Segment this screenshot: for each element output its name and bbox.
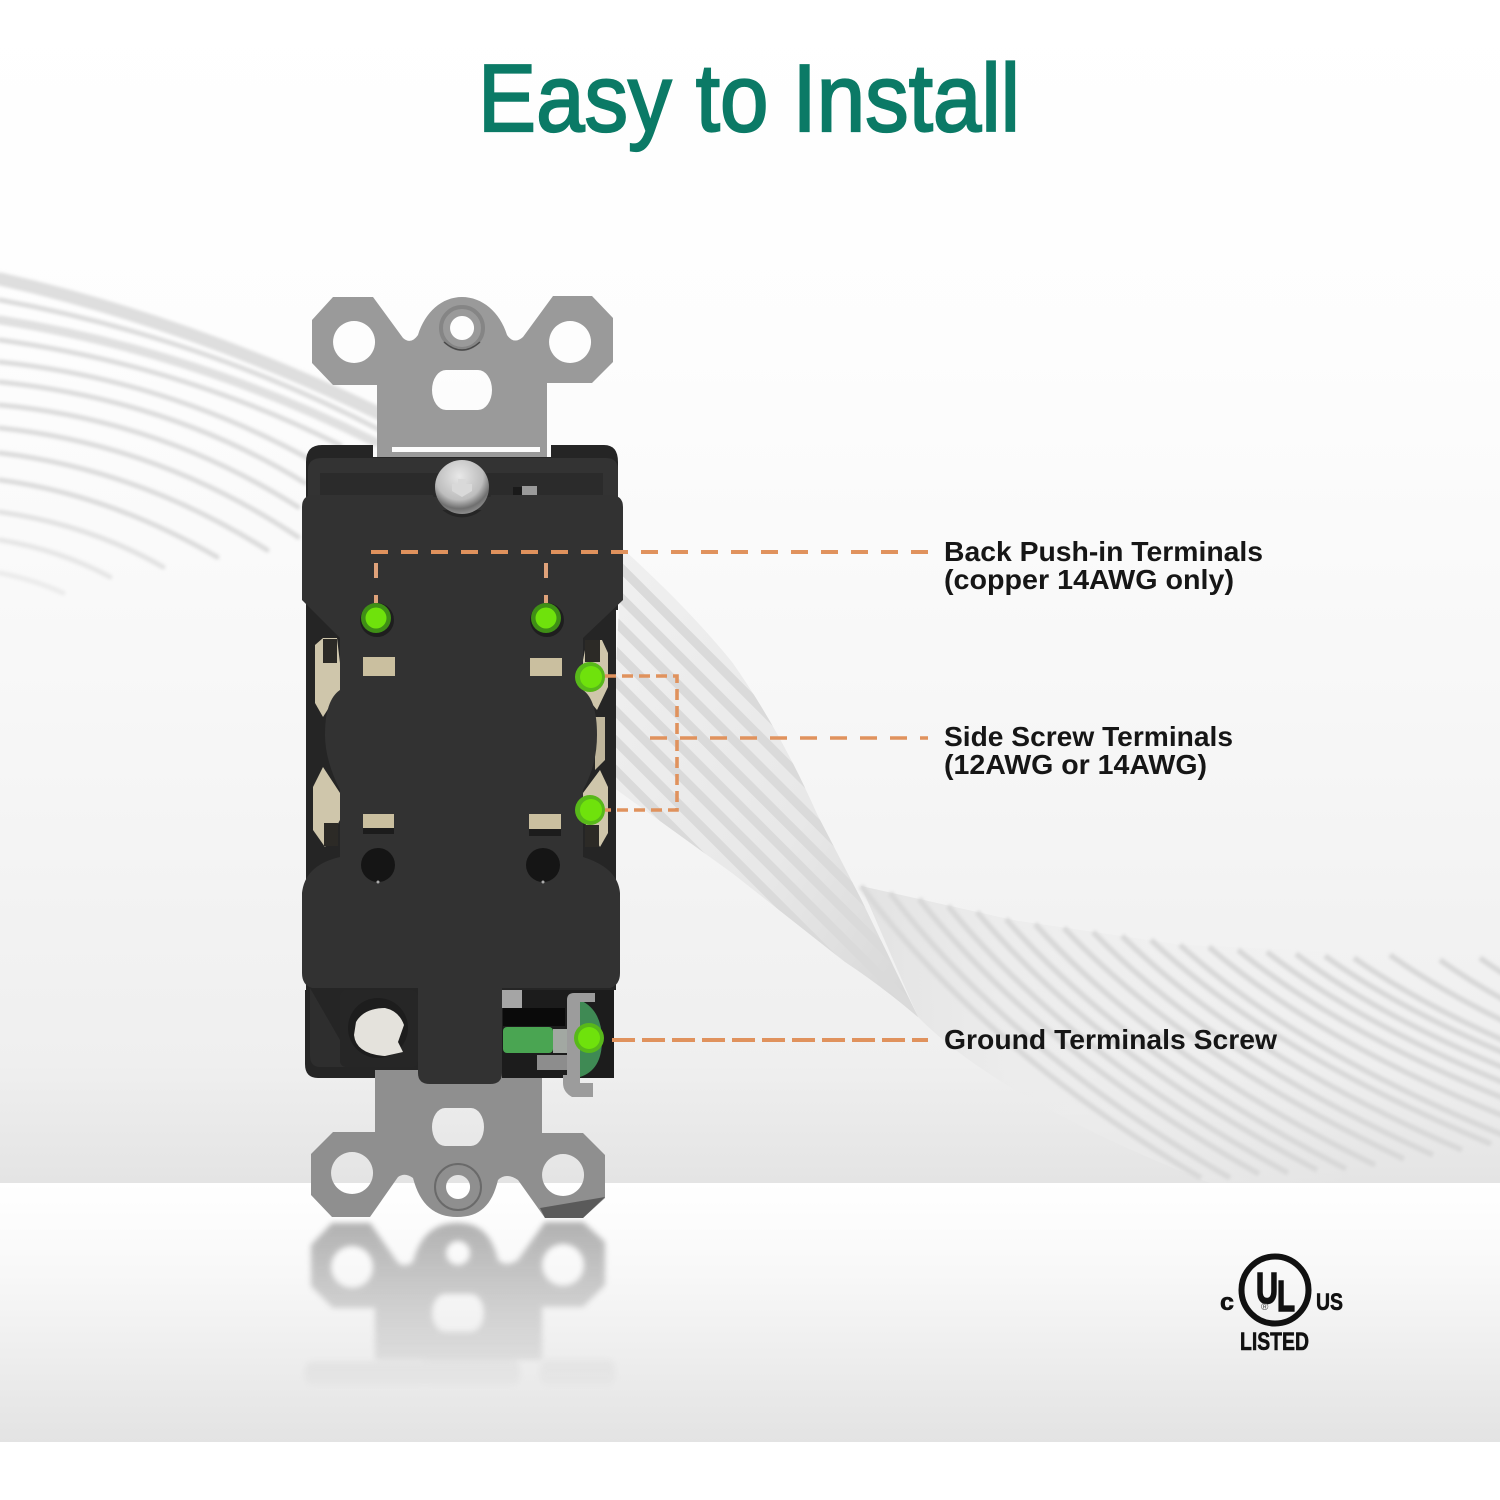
highlight dot: side screw lower [575,795,605,825]
bottom mounting strap [311,1070,605,1218]
label: side screw terminals [944,721,1233,780]
icon: cULus listed certification mark: c [1220,1289,1234,1316]
ribbon: right hatch lines [861,886,1500,1178]
icon: cULus listed certification mark: L [1277,1272,1295,1321]
reflection of the outlet on the floor [305,1222,615,1385]
callout: side screw leader lines [605,676,928,810]
neutral screw [354,1008,404,1056]
callout: ground leader line [612,1038,928,1042]
lower right ground assembly [502,990,614,1097]
highlight dot: side screw upper [575,662,605,692]
strap washer ring [441,307,483,349]
lower left screw recess [310,988,418,1067]
icon: cULus listed certification mark: LISTED [1240,1328,1309,1356]
highlight dot: back push-in left [360,603,394,637]
label: back push-in terminals [944,536,1263,595]
ribbon: band hatching [616,564,854,942]
label: side screw terminals: Side Screw Terminals [944,721,1233,752]
back housing [305,445,618,1078]
terminals right [583,640,608,847]
outlet device, back view [302,296,623,1218]
top housing recess [320,473,603,497]
contact windows [363,657,562,836]
icon: cULus listed certification mark: U [1256,1264,1278,1313]
icon: cULus listed certification mark [1220,1256,1343,1356]
top housing band [308,458,618,510]
ribbon: lower band base [865,887,970,1033]
callout: back push-in leader lines [371,552,928,603]
ribbon: central twisted band [610,548,918,1017]
label: ground terminals screw: Ground Terminals Screw [944,1024,1277,1055]
top mounting screw [435,460,489,514]
bottom strap shadow corner [540,1197,605,1218]
label: side screw terminals: (12AWG or 14AWG) [944,749,1207,780]
central cover [302,495,623,1084]
highlight dot: ground screw [574,1023,604,1053]
icon: cULus listed certification mark: ® [1261,1302,1269,1313]
title: Easy to Install [478,45,1020,152]
icon: cULus listed certification mark: US [1316,1289,1343,1316]
terminals left [313,638,340,847]
top mounting strap [312,296,613,457]
background wave ribbon [0,279,1500,1183]
ribbon: left curved stripes [0,279,380,593]
highlight dot: back push-in right [530,603,564,637]
reset tab [513,486,537,496]
reflective floor [0,1183,1500,1442]
bottom strap washer ring [435,1164,481,1210]
background wall [0,0,1500,1183]
strap slot highlight [392,447,540,452]
rear screws [361,848,560,884]
label: back push-in terminals: Back Push-in Terminals [944,536,1263,567]
label: back push-in terminals: (copper 14AWG only) [944,564,1234,595]
